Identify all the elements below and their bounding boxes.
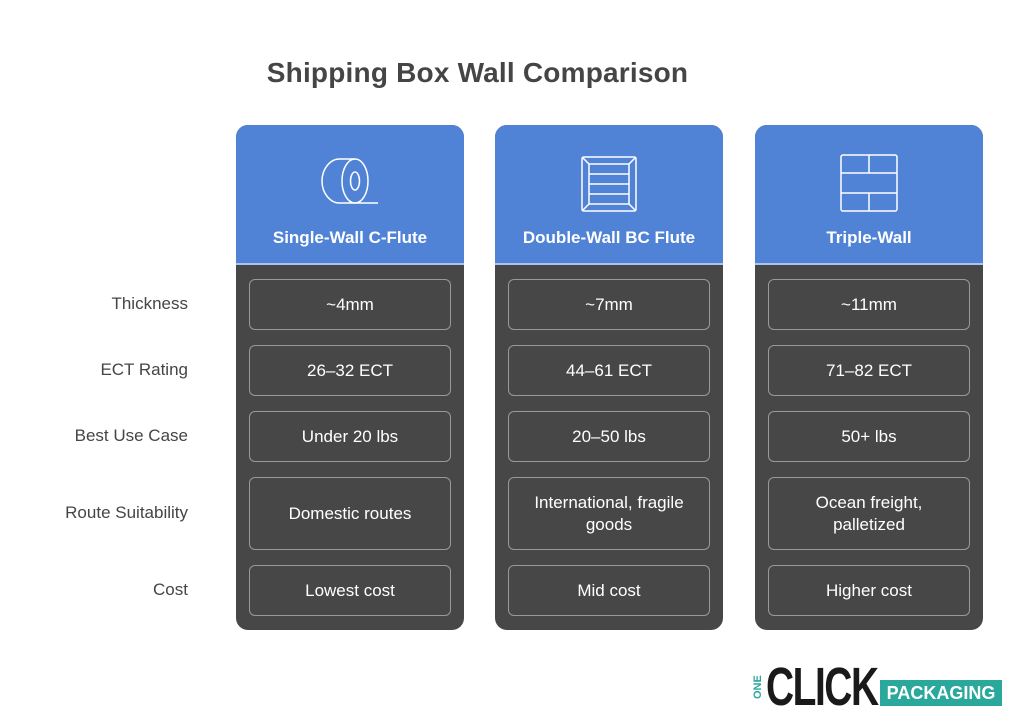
panel: triple-wall: ~11mm: [841, 294, 897, 314]
logo: ONE: [752, 675, 764, 699]
heading: Single-Wall C-Flute: [273, 228, 427, 247]
panel: triple-wall: Ocean freight,: [816, 492, 922, 512]
panel: single-wall: Lowest cost: [305, 580, 395, 600]
panel: single-wall: ~4mm: [326, 294, 374, 314]
logo: [752, 657, 1002, 717]
label: use case: Best Use Case: [75, 426, 188, 445]
panel: triple-wall: Higher cost: [826, 580, 912, 600]
panel: double-wall: goods: [586, 514, 632, 534]
icon: bricks: [840, 154, 898, 212]
panel: single-wall: 26–32 ECT: [307, 360, 393, 380]
panel: triple-wall: 50+ lbs: [841, 426, 897, 446]
panel: single-wall: Domestic routes: [289, 504, 411, 522]
panel: triple-wall: 71–82 ECT: [826, 360, 912, 380]
logo: CLICK: [766, 657, 878, 717]
heading: Triple-Wall: [826, 228, 912, 247]
panel: triple-wall: [755, 125, 983, 630]
panel: single-wall: [236, 125, 464, 630]
panel: double-wall: ~7mm: [585, 294, 633, 314]
panel: double-wall: Mid cost: [577, 580, 641, 600]
panel: single-wall: Under 20 lbs: [302, 426, 398, 446]
icon: roll: [321, 158, 378, 204]
label: thickness: Thickness: [111, 294, 188, 313]
heading: Double-Wall BC Flute: [523, 228, 695, 247]
icon: crate: [581, 156, 637, 212]
title: Shipping Box Wall Comparison: [267, 57, 688, 88]
panel: double-wall: 44–61 ECT: [566, 360, 652, 380]
panel: double-wall: International, fragile: [534, 492, 684, 512]
logo: PACKAGING: [887, 683, 995, 703]
label: route: Route Suitability: [65, 503, 188, 522]
panel: double-wall: 20–50 lbs: [572, 426, 646, 446]
row labels: [65, 294, 188, 599]
panel: triple-wall: palletized: [833, 514, 905, 534]
label: ect: ECT Rating: [100, 360, 188, 379]
label: cost: Cost: [153, 580, 188, 599]
panel: double-wall: [495, 125, 723, 630]
